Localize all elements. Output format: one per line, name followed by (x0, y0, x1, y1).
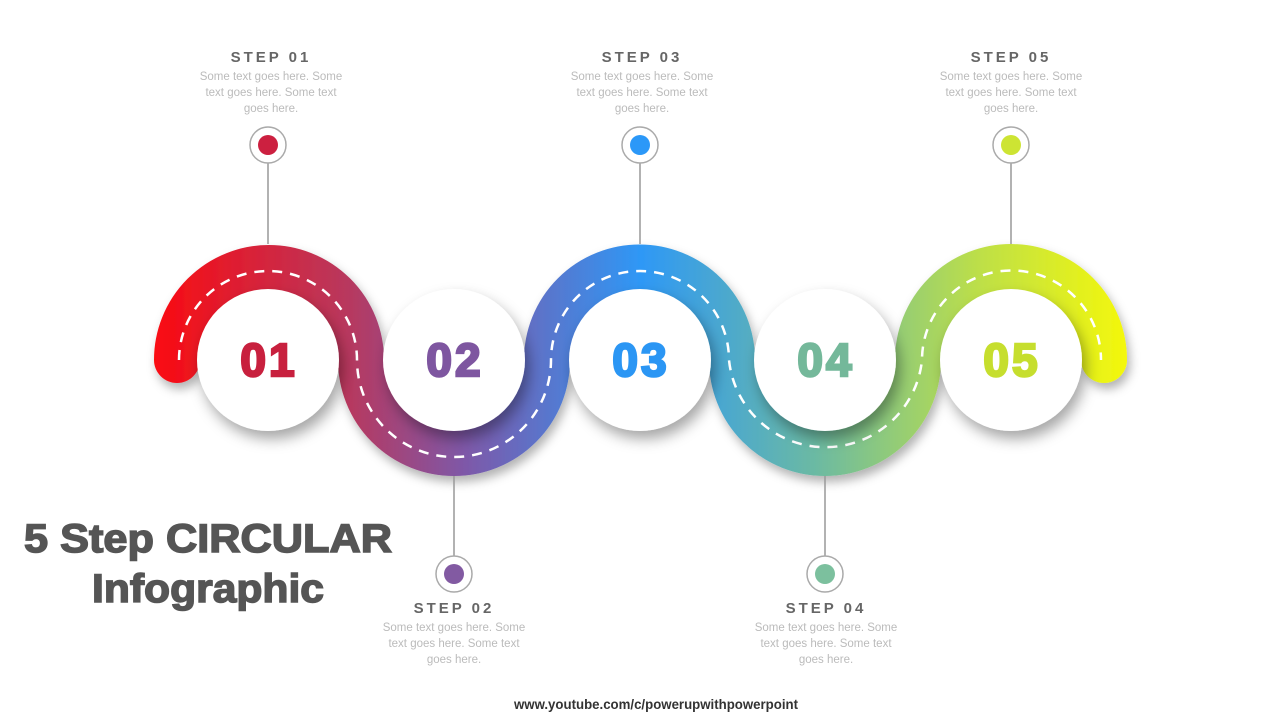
step 04 text (755, 600, 897, 666)
connector lines (268, 163, 1011, 556)
step 02 text: text goes here. Some text (388, 638, 520, 650)
wave tube (177, 267, 1104, 457)
pin 01 (250, 127, 286, 163)
step 05 text: Some text goes here. Some (940, 71, 1082, 83)
step 01 text: STEP 01 (231, 49, 311, 66)
step 03 text: text goes here. Some text (576, 87, 708, 99)
step 05 text (940, 49, 1082, 115)
step texts (200, 49, 1082, 666)
circle 02 (383, 289, 525, 431)
step 05 text: goes here. (984, 103, 1038, 115)
circle 04 (754, 289, 896, 431)
circle 03: 03 (612, 334, 670, 386)
step 03 text: STEP 03 (602, 49, 682, 66)
step 04 text: text goes here. Some text (760, 638, 892, 650)
circle 04: 04 (797, 334, 855, 386)
footer url: www.youtube.com/c/powerupwithpowerpoint (513, 696, 798, 712)
circle 05 (940, 289, 1082, 431)
step 05 text: STEP 05 (971, 49, 1051, 66)
step 01 text: Some text goes here. Some (200, 71, 342, 83)
pin 03 (622, 127, 658, 163)
step 02 text (383, 600, 525, 666)
title (24, 517, 392, 611)
step 04 text: goes here. (799, 654, 853, 666)
pin 05 (993, 127, 1029, 163)
title: 5 Step CIRCULAR (24, 517, 392, 561)
pin 02 (436, 556, 472, 592)
circle 05: 05 (983, 334, 1041, 386)
pin markers (250, 127, 1029, 592)
circle 01: 01 (240, 334, 298, 386)
step 04 text: Some text goes here. Some (755, 622, 897, 634)
title: Infographic (92, 567, 324, 611)
step 03 text (571, 49, 713, 115)
circle 03 (569, 289, 711, 431)
step 04 text: STEP 04 (786, 600, 866, 617)
step 02 text: Some text goes here. Some (383, 622, 525, 634)
step 05 text: text goes here. Some text (945, 87, 1077, 99)
step 03 text: goes here. (615, 103, 669, 115)
circle 01 (197, 289, 339, 431)
number circles (197, 289, 1082, 431)
circle 02: 02 (426, 334, 484, 386)
step 01 text: text goes here. Some text (205, 87, 337, 99)
step 01 text (200, 49, 342, 115)
step 01 text: goes here. (244, 103, 298, 115)
pin 04 (807, 556, 843, 592)
step 03 text: Some text goes here. Some (571, 71, 713, 83)
step 02 text: goes here. (427, 654, 481, 666)
step 02 text: STEP 02 (414, 600, 494, 617)
